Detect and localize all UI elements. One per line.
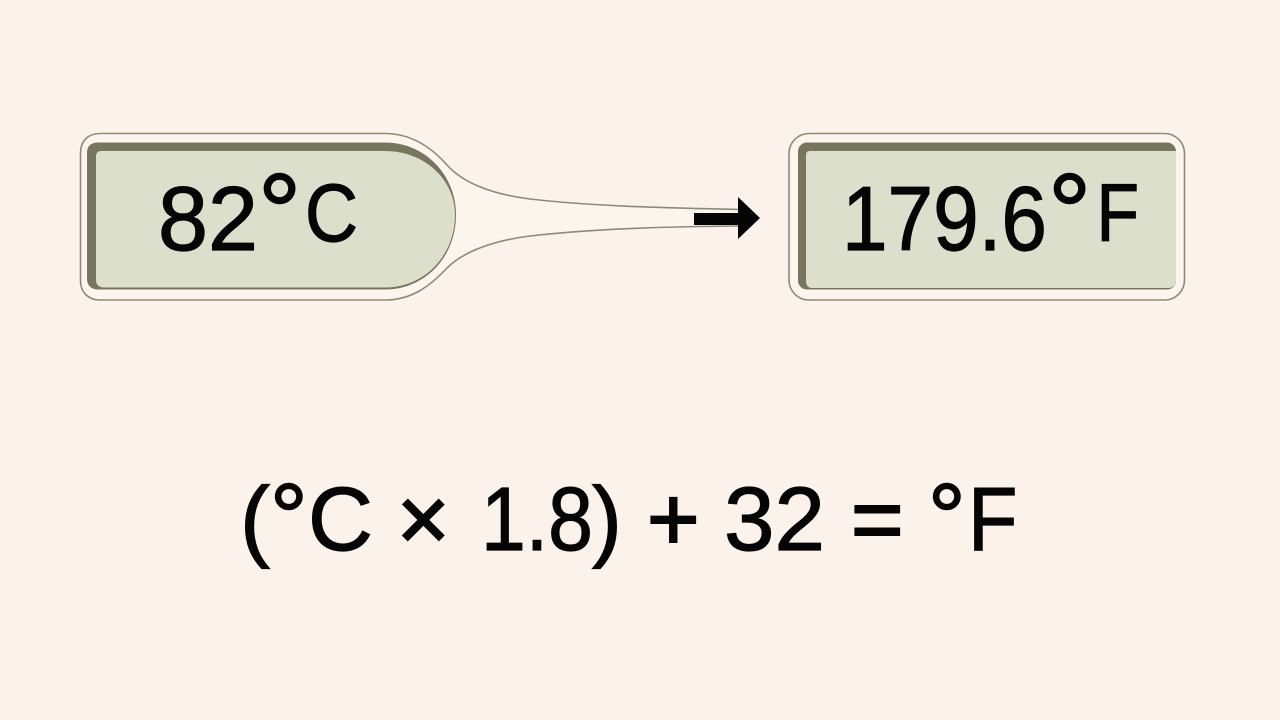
formula: = (851, 470, 904, 570)
LCD display (806, 151, 1176, 288)
formula: ° (270, 464, 308, 569)
formula: 1.8 (481, 470, 593, 570)
formula: ) (592, 470, 622, 570)
reading: 82°C: 82 (158, 169, 258, 270)
serif foot on the 1 (849, 244, 870, 250)
reading: 179.6°F (842, 151, 1139, 272)
reading: 82°C: C (305, 168, 358, 259)
reading: 82°C: ° (258, 151, 301, 272)
reading: 179.6°F: ° (1048, 151, 1091, 272)
display recess shadow (798, 142, 1176, 290)
formula: × (397, 470, 450, 570)
formula: ( (240, 470, 270, 570)
reading: 179.6°F: 179.6 (842, 169, 1047, 270)
LCD display (96, 151, 455, 288)
reading: 179.6°F: F (1096, 168, 1139, 259)
panel: Fahrenheit display (789, 134, 1184, 300)
formula: F (968, 470, 1018, 570)
formula (240, 464, 1018, 570)
serif foot on the 1 (491, 544, 515, 550)
display frame (789, 134, 1184, 300)
formula: ° (928, 464, 966, 569)
panel: Celsius thermometer (80, 134, 740, 300)
thermometer body outline (80, 134, 740, 300)
arrow (694, 197, 760, 239)
display recess shadow (87, 142, 456, 290)
formula: C (308, 470, 373, 570)
formula: 32 (724, 470, 825, 570)
formula: + (647, 470, 700, 570)
reading: 82°C (158, 151, 358, 272)
